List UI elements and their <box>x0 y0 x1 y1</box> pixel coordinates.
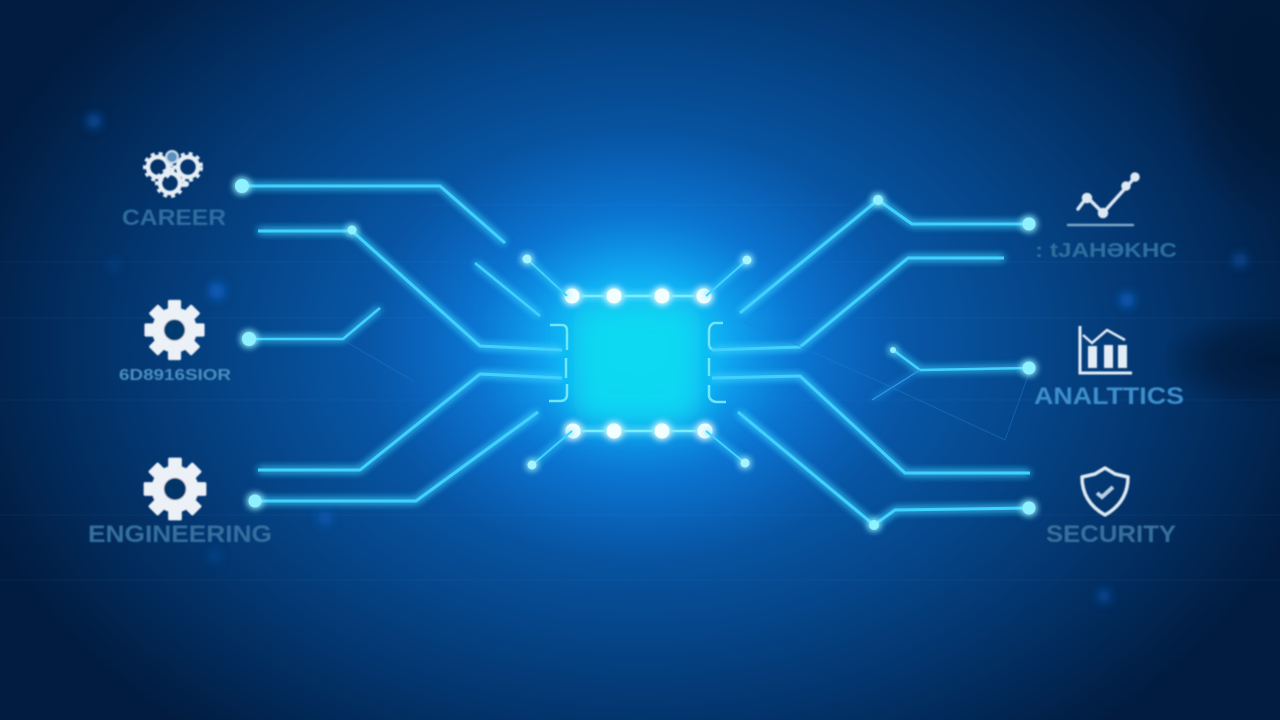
chip bottom contact row <box>566 424 712 438</box>
panel: profession <box>119 300 232 384</box>
icon: gear <box>144 458 206 520</box>
label: career: CAREER <box>122 205 226 230</box>
icon: bar chart <box>1080 326 1132 373</box>
panel: engineering <box>88 458 272 548</box>
circuit traces left <box>242 186 572 501</box>
circuit traces right <box>706 200 1030 525</box>
label: garbled profession: 6D8916SIOR <box>119 367 232 384</box>
panel: analytics <box>1034 326 1184 410</box>
central chip <box>549 288 726 438</box>
icon: line chart <box>1068 174 1138 225</box>
panel: security <box>1046 468 1176 548</box>
chip top contact row <box>564 288 712 304</box>
chip side brackets <box>549 323 726 402</box>
label: garbled growth: : tJAHƏKHC <box>1035 240 1177 262</box>
icon: gear <box>144 300 205 360</box>
label: engineering: ENGINEERING <box>88 521 272 548</box>
panel: career <box>122 151 226 230</box>
panel: growth <box>1035 174 1177 262</box>
icon: cluster of gears <box>144 151 202 196</box>
label: security: SECURITY <box>1046 521 1176 548</box>
icon: shield <box>1082 468 1128 515</box>
trace end nodes <box>235 179 1036 530</box>
label: analytics: ANALTTICS <box>1034 383 1184 410</box>
faint network lines <box>343 322 1030 440</box>
